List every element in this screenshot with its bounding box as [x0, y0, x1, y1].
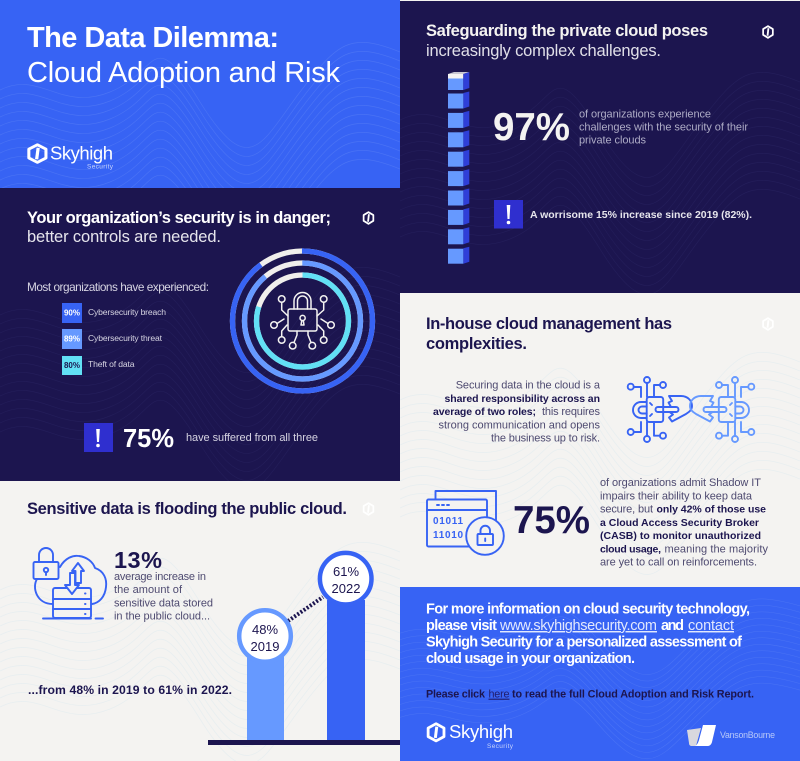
- callout: 75% suffered from all three: 75%: [123, 425, 174, 453]
- heading: complexities.: [426, 335, 527, 353]
- text: intro: Most organizations have experienced:: [27, 280, 209, 294]
- logo: Skyhigh Security: Security: [487, 743, 514, 750]
- chart: growth bars: [208, 553, 400, 745]
- text: more information: and: [661, 618, 684, 634]
- icon: browser binary lock: 01011: [433, 516, 463, 527]
- stat: 13%: average increase in: [114, 571, 206, 583]
- stat: 13%: [114, 547, 213, 622]
- text: shared responsibility: average of two roles;: [433, 406, 536, 418]
- stat: 97%: of organizations experience: [579, 108, 711, 120]
- stat: 97%: private clouds: [579, 135, 646, 147]
- text: shadow IT: impairs their ability to keep data: [600, 490, 753, 502]
- panel: private cloud: [400, 1, 800, 293]
- heading: better controls are needed.: [27, 228, 221, 246]
- logo: Skyhigh Security: [29, 142, 114, 170]
- stat: 97%: challenges with the security of their: [579, 122, 748, 134]
- legend: experience rates: 90%: [64, 308, 80, 318]
- icon: faded logo: [364, 503, 373, 515]
- text: shadow IT: secure, but: [600, 504, 653, 516]
- title: Cloud Adoption and Risk: [27, 57, 340, 89]
- text: report link: here: [488, 689, 510, 701]
- icon: hands unplugging left: [628, 377, 692, 442]
- text: more information: Skyhigh Security for a personalized assessment of: [426, 635, 742, 651]
- icon: browser binary lock: [427, 491, 504, 555]
- logo: Skyhigh Security: Skyhigh: [50, 142, 113, 164]
- logo: VansonBourne: [687, 725, 775, 746]
- panel: public cloud data: [0, 500, 400, 761]
- heading: Safeguarding the private cloud poses: [426, 22, 708, 40]
- stat: 13%: in the public cloud...: [114, 610, 210, 622]
- logo: Skyhigh Security: Skyhigh: [449, 721, 513, 742]
- text: more information: cloud usage in your organization.: [426, 651, 635, 667]
- icon: small logo: [364, 212, 373, 224]
- title: [27, 22, 340, 89]
- stat: 13%: the amount of: [114, 584, 183, 596]
- text: more information: For more information on cloud security technology,: [426, 602, 750, 618]
- callout: 15% increase: A worrisome 15% increase since 2019 (82%).: [530, 209, 752, 221]
- text: shared responsibility: [433, 380, 601, 444]
- panel: organization security: [0, 188, 400, 481]
- icon: hands unplugging right: [690, 377, 754, 442]
- text: shared responsibility: this requires: [542, 406, 600, 418]
- logo: VansonBourne: VansonBourne: [720, 730, 775, 740]
- heading: [426, 315, 672, 353]
- stat: 97%: 97%: [493, 106, 570, 149]
- chart: stacked cubes: [448, 72, 469, 264]
- chart: growth bars: 2019: [251, 639, 279, 654]
- logo: Skyhigh Security: [428, 721, 514, 750]
- stat: 13%: sensitive data stored: [114, 598, 213, 610]
- stat: 75%: 75%: [513, 499, 590, 542]
- callout: 75% suffered from all three: [84, 423, 318, 453]
- heading: [27, 209, 331, 246]
- icon: small logo: [763, 26, 773, 38]
- panel: call to action: [400, 587, 800, 761]
- legend: experience rates: Cybersecurity breach: [88, 307, 166, 317]
- text: more information: www.skyhighsecurity.com: [499, 618, 657, 634]
- heading: Your organization’s security is in danger;: [27, 209, 331, 227]
- heading: In-house cloud management has: [426, 315, 672, 333]
- chart: growth bars: 48%: [252, 622, 278, 637]
- legend: experience rates: [62, 303, 166, 375]
- text: more information: contact: [688, 618, 734, 634]
- text: shadow IT: meaning the majority: [664, 544, 768, 556]
- heading: [426, 22, 708, 60]
- text: report link: to read the full Cloud Adoption and Risk Report.: [512, 689, 754, 701]
- text: shadow IT: (CASB) to monitor unauthorized: [600, 530, 761, 542]
- text: more information: [426, 602, 750, 667]
- legend: experience rates: Cybersecurity threat: [88, 333, 163, 343]
- text: report link: Please click: [426, 689, 486, 701]
- text: shared responsibility: Securing data in the cloud is a: [456, 380, 601, 392]
- text: shared responsibility: strong communication and opens: [438, 420, 600, 432]
- title: The Data Dilemma:: [27, 22, 279, 54]
- text: shadow IT: of organizations admit Shadow IT: [600, 477, 761, 489]
- callout: 75% suffered from all three: have suffered from all three: [186, 432, 318, 444]
- chart: growth bars: 2022: [332, 581, 360, 596]
- icon: faded logo: [763, 318, 773, 330]
- heading: Sensitive data is flooding the public cloud.: [27, 500, 347, 518]
- text: from 48% to 61%: ...from 48% in 2019 to 61% in 2022.: [28, 683, 232, 697]
- text: shadow IT: are yet to call on reinforcements.: [600, 556, 757, 568]
- legend: experience rates: 89%: [64, 334, 80, 344]
- text: more information: please visit: [426, 618, 497, 634]
- stat: 13%: 13%: [114, 547, 162, 573]
- icon: browser binary lock: 11010: [433, 530, 463, 541]
- logo: Skyhigh Security: Security: [87, 164, 114, 170]
- callout: 15% increase: [494, 200, 752, 228]
- chart: growth bars: 61%: [333, 564, 359, 579]
- panel: in-house management: [400, 315, 800, 575]
- legend: experience rates: 80%: [64, 361, 80, 370]
- text: shadow IT: only 42% of those use: [656, 504, 766, 516]
- text: shadow IT: a Cloud Access Security Broker: [600, 517, 759, 529]
- stat: 97%: [493, 106, 748, 149]
- text: shadow IT: [600, 477, 768, 568]
- text: shared responsibility: the business up to risk.: [491, 432, 600, 444]
- heading: increasingly complex challenges.: [426, 42, 661, 60]
- panel: title banner: [0, 0, 400, 188]
- icon: cloud data lock: [34, 548, 106, 618]
- text: shadow IT: cloud usage,: [600, 544, 661, 556]
- legend: experience rates: Theft of data: [88, 359, 135, 369]
- chart: concentric rings: [232, 251, 372, 391]
- text: shared responsibility: shared responsibility across an: [444, 393, 600, 405]
- icon: circuit padlock: [271, 292, 334, 349]
